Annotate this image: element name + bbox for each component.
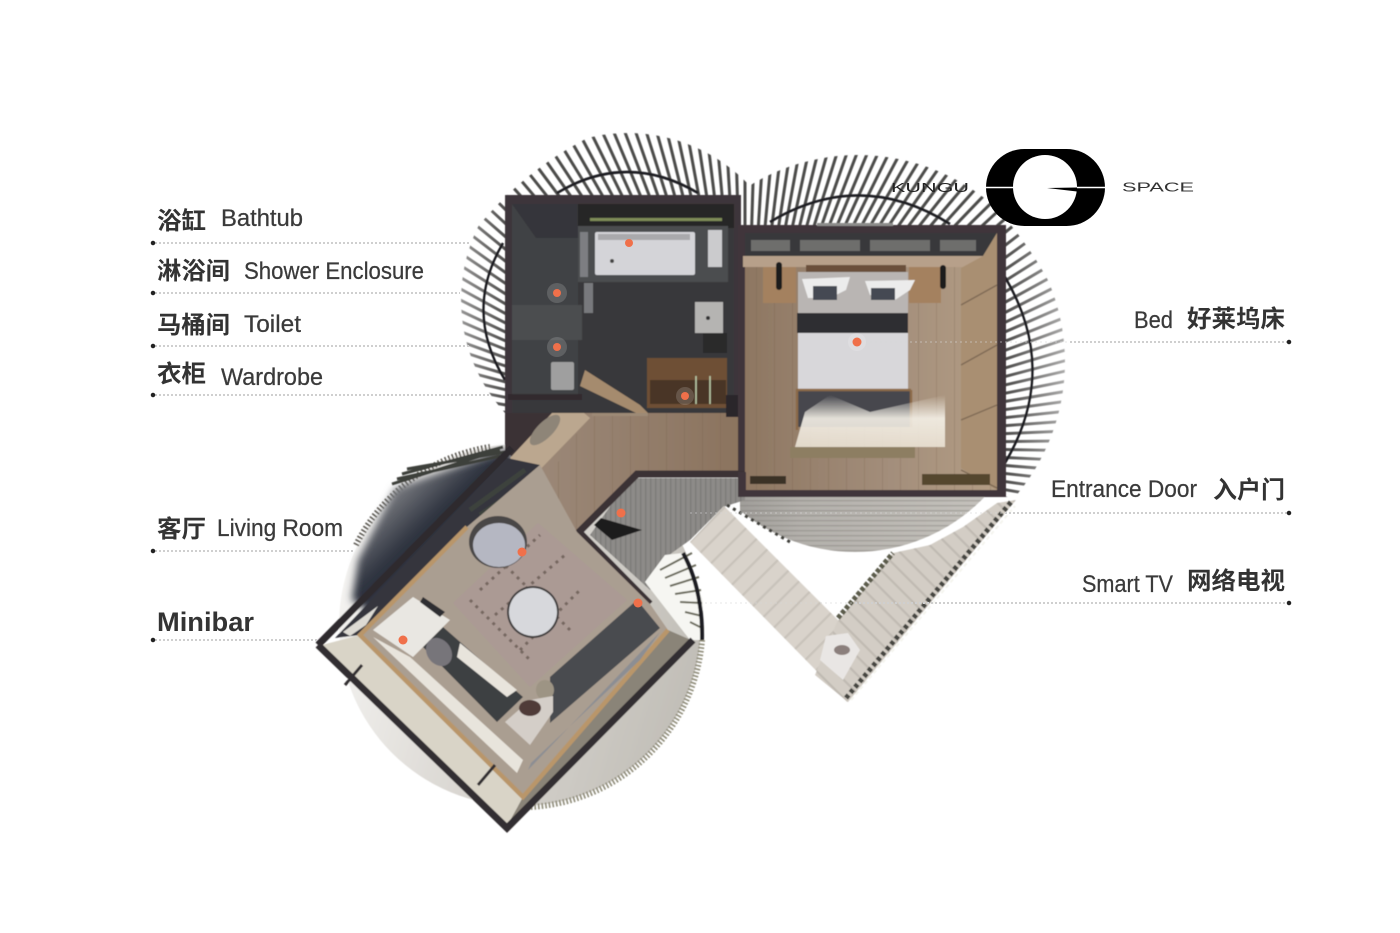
- outer walls: [318, 640, 693, 828]
- headboard ledge: [743, 256, 983, 267]
- lounge figure: [834, 645, 850, 655]
- outer rail light: [851, 506, 1015, 700]
- towel rail: [584, 283, 593, 313]
- left arm: [690, 506, 870, 702]
- left labels: [157, 205, 424, 637]
- toothed edge upper left: [356, 447, 490, 545]
- logo body: [986, 149, 1105, 226]
- side table plant: [536, 680, 554, 700]
- label wardrobe en: Wardrobe: [221, 364, 323, 391]
- right leader tv: [855, 602, 1288, 604]
- label living en: Living Room: [217, 515, 343, 542]
- gold frame: [360, 527, 668, 797]
- outer band lower left: [322, 635, 523, 826]
- grey cushion: [421, 633, 457, 671]
- right labels: [1051, 306, 1285, 598]
- label door en: Entrance Door: [1051, 476, 1197, 503]
- slats: [460, 132, 1066, 498]
- coffee table top: [509, 588, 557, 636]
- logo word kungu: KUNGU: [891, 181, 969, 195]
- dark arcs: [483, 172, 1032, 463]
- leader lines: [153, 243, 1289, 640]
- towel: [580, 232, 588, 277]
- floor plan illustration: [315, 132, 1066, 834]
- left leader living: [155, 550, 355, 552]
- lower white band: [373, 637, 523, 773]
- duvet: [798, 333, 908, 390]
- floor: [745, 233, 997, 490]
- marker bed: [852, 338, 862, 346]
- white cushions: [457, 643, 517, 697]
- sofa right arm: [550, 600, 660, 723]
- floor decor left: [750, 476, 786, 484]
- logo wedge: [1047, 188, 1077, 192]
- lamp left: [776, 262, 782, 290]
- inner rail: [838, 553, 893, 618]
- disc base: [339, 444, 701, 806]
- bedroom shell: [738, 223, 1006, 497]
- sink counter: [695, 302, 723, 333]
- tan entry mat strip: [510, 398, 590, 480]
- ottoman top: [473, 523, 525, 567]
- wardrobe inner: [650, 380, 726, 404]
- lounge chair: [820, 633, 860, 680]
- vanity lower: [703, 333, 727, 353]
- right leader bed: [1070, 341, 1288, 343]
- deck V: [690, 500, 1016, 702]
- faint leader over bed: [860, 341, 1070, 343]
- hall and floor: [390, 405, 745, 760]
- white streak: [343, 606, 378, 636]
- window panes: [751, 240, 976, 251]
- logo word space: SPACE: [1122, 180, 1194, 194]
- left leader toilet: [155, 345, 470, 347]
- entry wall: [579, 474, 745, 604]
- top stone ledge: [817, 223, 893, 226]
- floor planks: [745, 233, 997, 490]
- marker living room: [518, 548, 526, 556]
- marker wardrobe: [681, 392, 689, 400]
- hall plank lines: [540, 413, 745, 532]
- faint leader over deck: [705, 602, 855, 604]
- label minibar: Minibar: [157, 607, 254, 637]
- dark strip behind wall: [335, 458, 540, 638]
- window band: [745, 233, 997, 256]
- left arm stripes: [690, 506, 870, 702]
- logo: [891, 149, 1194, 226]
- fronds: [392, 447, 505, 484]
- hotspot markers: [398, 239, 866, 644]
- outer wall: [738, 225, 1006, 497]
- bathroom floor: [512, 204, 734, 413]
- bench: [796, 390, 911, 427]
- outer band lower right: [507, 630, 691, 826]
- inner divider lines: [345, 665, 495, 785]
- window slats: [660, 553, 702, 628]
- label toilet cn: 马桶间: [157, 312, 230, 339]
- label shower cn: 淋浴间: [157, 258, 230, 285]
- right arm: [815, 500, 1016, 702]
- lower right strip: [528, 632, 660, 770]
- dark ring at right: [683, 553, 702, 640]
- niche: [708, 230, 722, 267]
- dark shadow upper left: [352, 450, 518, 612]
- living room disc: [339, 444, 702, 807]
- marker minibar: [398, 636, 408, 644]
- lamp right: [940, 265, 946, 289]
- label tv en: Smart TV: [1082, 571, 1173, 598]
- cushion right: [871, 288, 895, 300]
- left leader wardrobe: [155, 394, 490, 396]
- left dark storage: [505, 395, 570, 460]
- right arm stripes: [815, 500, 1016, 702]
- label door cn: 入户门: [1213, 477, 1285, 504]
- floor decor right: [922, 474, 990, 485]
- plants: [470, 470, 540, 520]
- living room: [318, 448, 693, 828]
- marker bathtub: [625, 239, 633, 247]
- white wedge by window: [645, 553, 703, 640]
- tub drain: [610, 259, 614, 263]
- bed runner: [797, 313, 908, 333]
- inner top rail: [727, 505, 790, 542]
- label living cn: 客厅: [157, 515, 206, 543]
- end dots: [153, 243, 1289, 640]
- marker shower: [553, 289, 561, 297]
- bed base: [798, 272, 908, 390]
- headboard: [806, 265, 906, 275]
- person: [505, 696, 553, 745]
- entry patio: [590, 478, 745, 590]
- cushion left: [813, 286, 837, 300]
- green glow strip: [590, 218, 722, 221]
- sink drain: [706, 316, 710, 320]
- left leader minibar: [155, 639, 318, 641]
- label bathtub cn: 浴缸: [157, 207, 206, 235]
- right wall lines: [961, 285, 997, 488]
- bottom shower wall: [508, 394, 582, 400]
- rug: [790, 447, 915, 458]
- minibar counter: [373, 597, 450, 657]
- shower glass band: [512, 305, 582, 340]
- diagonal upper wall: [318, 448, 512, 645]
- hall cover below bath: [592, 413, 648, 416]
- radial slat heart around bathroom and bedroom: [460, 132, 1066, 498]
- oval rug: [525, 410, 565, 450]
- bathtub: [595, 232, 695, 275]
- left fade: [460, 202, 504, 406]
- pier: [726, 395, 741, 417]
- vanity wall: [578, 204, 734, 228]
- left leader bathtub: [155, 242, 470, 244]
- outer rail: [846, 502, 1011, 698]
- tub surround: [578, 226, 728, 282]
- left leader shower: [155, 292, 460, 294]
- round ottoman: [469, 516, 527, 568]
- marker toilet: [553, 343, 561, 351]
- building: [318, 195, 1006, 828]
- wardrobe: [647, 358, 727, 408]
- minibar dark shelf: [420, 597, 445, 617]
- right fade: [1007, 234, 1066, 494]
- label bathtub en: Bathtub: [221, 205, 303, 232]
- wardrobe rods: [696, 376, 710, 404]
- door wedge: [580, 370, 648, 413]
- toothed edge lower right: [530, 640, 702, 807]
- shower top shade: [512, 204, 578, 238]
- right wood wall: [961, 233, 997, 490]
- marker halos: [547, 283, 866, 405]
- logo slit: [986, 186, 1105, 188]
- entry patio stripes: [590, 478, 745, 590]
- label tv cn: 网络电视: [1187, 567, 1285, 595]
- rug mottling: [470, 535, 580, 660]
- logo mark: [986, 149, 1105, 226]
- marker entrance: [616, 508, 626, 518]
- label shower en: Shower Enclosure: [244, 258, 424, 285]
- pillow right: [865, 280, 915, 300]
- right leader door: [1005, 512, 1288, 514]
- sun patch: [795, 395, 945, 447]
- label bed en: Bed: [1134, 307, 1173, 334]
- coffee table: [507, 586, 559, 638]
- room floor: [360, 465, 668, 797]
- bed wall joint: [738, 472, 746, 497]
- pillow left: [802, 277, 850, 298]
- bathroom shell: [505, 195, 741, 417]
- patio disc under bedroom: [739, 496, 984, 552]
- label toilet en: Toilet: [244, 311, 301, 338]
- faint leader over patio: [690, 512, 1005, 514]
- tub shade: [598, 234, 690, 240]
- entry closet mark: [594, 518, 642, 540]
- shower zone: [512, 204, 578, 396]
- label bed cn: 好莱坞床: [1187, 306, 1285, 333]
- sofa left arm: [423, 627, 523, 722]
- toilet: [551, 362, 574, 390]
- logo inner circle: [1013, 155, 1077, 219]
- figure: [519, 700, 541, 716]
- nightstand right: [909, 267, 941, 303]
- armchair: [505, 696, 553, 745]
- rug: [453, 523, 627, 687]
- marker smart tv: [634, 598, 642, 608]
- outer wall: [505, 195, 741, 413]
- nightstand left: [763, 267, 796, 303]
- bench frame: [796, 390, 911, 430]
- label wardrobe cn: 衣柜: [157, 361, 206, 388]
